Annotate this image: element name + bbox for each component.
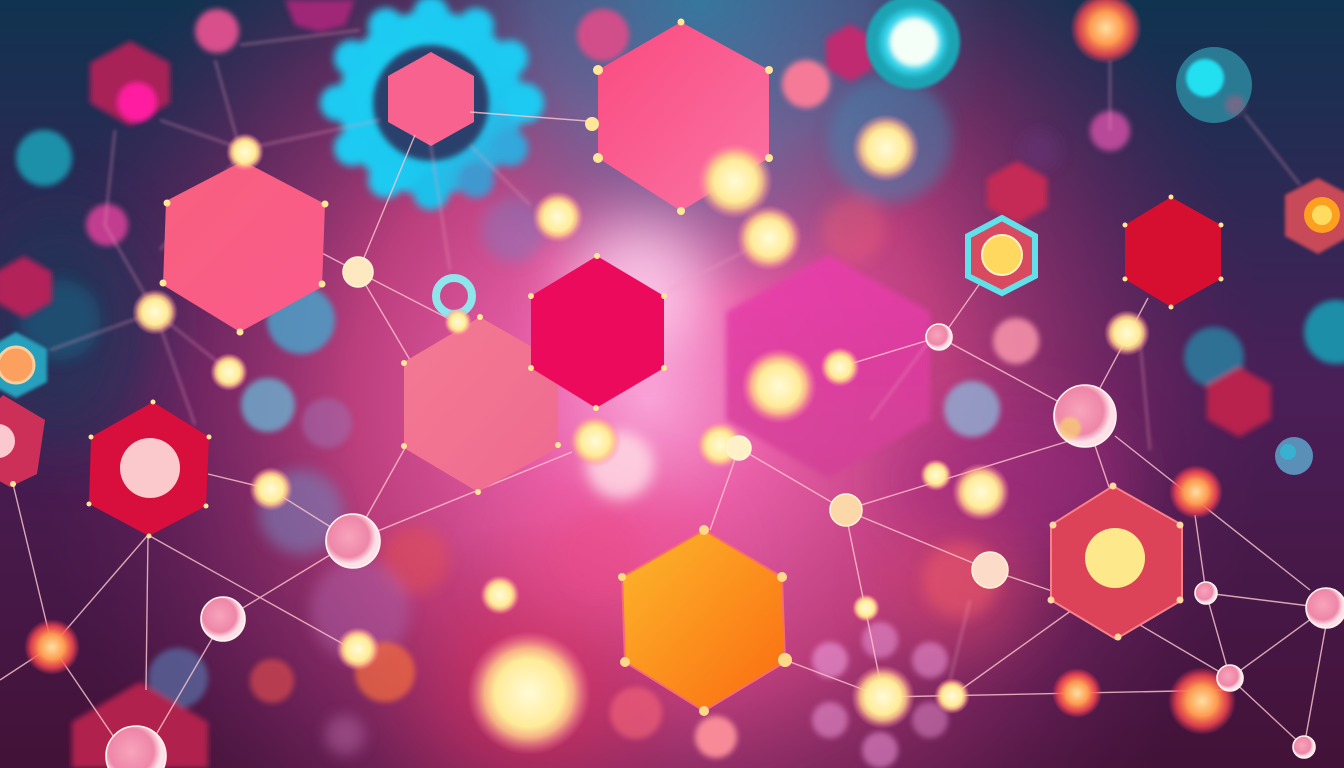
magenta large hexagon xyxy=(726,255,930,478)
hexagon: cyan outlined with yellow core xyxy=(968,218,1035,293)
hexagon: red at right edge with orange core xyxy=(1285,178,1344,254)
yellow inclusion in large bubble xyxy=(1059,417,1081,439)
hexagon: cyan outlined at left edge xyxy=(0,332,47,398)
hexagon: left edge with pale circle xyxy=(0,395,45,487)
icon: cyan gear with hexagon xyxy=(320,0,544,210)
bubble: cyan top right xyxy=(1176,47,1252,123)
hexagon: crimson upper right xyxy=(1122,194,1224,310)
hexagon: large pink top-center xyxy=(585,18,773,215)
hexagon: red with white circle xyxy=(86,400,212,538)
hexagon: crimson center xyxy=(528,253,667,411)
faint background connection lines xyxy=(50,30,1300,680)
ring: cyan small xyxy=(436,278,472,314)
glass bubble nodes xyxy=(106,324,1344,768)
bubble: small blue right xyxy=(1275,437,1313,475)
hexagon: coral with yellow circle xyxy=(1048,482,1184,640)
hexagon: salmon center xyxy=(401,314,561,495)
hot pink spot on dark hexagon xyxy=(117,82,157,122)
cyan glow orb top xyxy=(866,0,960,89)
pale node orbs xyxy=(343,257,1008,588)
hexagon: large pink top-left xyxy=(160,158,328,336)
blurred large bokeh xyxy=(20,78,1060,755)
hexagon: orange bottom xyxy=(618,525,792,716)
gear ring xyxy=(320,0,544,210)
